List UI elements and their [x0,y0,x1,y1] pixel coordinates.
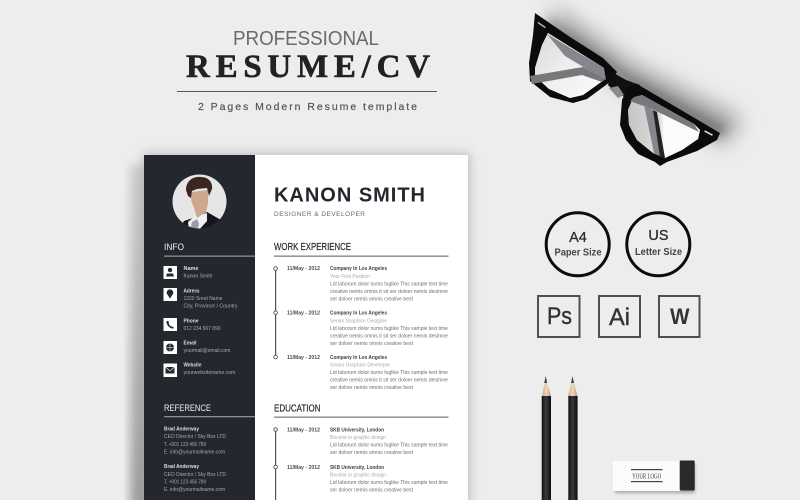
education 1: Boceior in graphic design [330,435,386,441]
software icon: word [659,296,700,337]
job 3: Senior Graphice Developer [330,362,390,368]
reference 2: T. +001 123 456 789 [164,480,206,486]
info item: name: Kanon Smith [184,274,213,280]
education section [274,402,448,500]
info item: address: City, Province / Country [184,304,238,310]
name heading: KANON SMITH [274,184,425,206]
role subtitle: DESIGNER & DEVELOPER [274,211,365,218]
info item: email [164,340,231,354]
eraser [613,460,695,493]
job 1: Company In Los Angeles [330,266,387,272]
profile photo [172,174,226,228]
info item: phone: Phone [184,319,198,325]
job 1: creative nemis omnis it sit ser doloer nemis desimne [330,289,448,295]
job 3: Lid laborum dolor nums fuglike This sample text time [330,370,448,376]
badge: us letter size [627,213,690,276]
job 3: creative nemis omnis it sit ser doloer nemis desimne [330,378,448,384]
job 2: ser doloer nemis omnis creative best [330,341,414,347]
info item: address: 1220 Sreet Name [184,296,223,302]
info item: name: Name [184,266,198,272]
education 2: SKB University, London [330,465,384,471]
title: professional: PROFESSIONAL [233,28,379,50]
job 3: Company In Los Angeles [330,355,387,361]
info heading: INFO [164,242,184,253]
eraser logo text: YOUR LOGO [632,472,662,480]
reference heading: REFERENCE [164,403,211,414]
education 1: Lid laborum dolor nums fuglike This sample text time [330,442,448,448]
education 1: ser doloer nemis omnis creative best [330,450,414,456]
job 3 [274,355,448,391]
info item: address: Adress [184,288,200,294]
job 2: 11/May - 2012 [287,310,320,316]
subtitle: 2 Pages Modern Resume template [198,101,417,113]
resume sheet [130,153,470,500]
left lens temple arms [530,34,606,84]
job 3: ser doloer nemis omnis creative best [330,385,414,391]
reference 1: CEO Director / Sky Box LTD [164,434,226,440]
education 1 [274,428,448,456]
software icon: photoshop: Ps [547,303,572,330]
glasses [529,4,742,166]
education 1: 11/May - 2012 [287,428,320,434]
education 2: Boceior in graphic design [330,472,386,478]
info item: email: Email [184,340,197,346]
sidebar panel [144,155,255,500]
badge: a4 paper size: A4 [569,230,587,246]
reference 1: E. info@yourmailname.com [164,450,226,456]
job 3: 11/May - 2012 [287,355,320,361]
pencil 1 [542,376,551,500]
reference 1: Brad Anderway [164,427,199,433]
work experience section [274,241,448,391]
title block [177,28,437,113]
bridge [608,72,640,98]
left lens frame [529,13,617,103]
reference 1: T. +001 123 456 789 [164,442,206,448]
badge: us letter size: Letter Size [635,246,682,258]
info item: name [164,266,213,280]
info item: phone: 012 234 567 890 [184,326,221,332]
software icon: photoshop [538,296,580,337]
job 1: Your First Position [330,274,370,280]
badge: us letter size: US [648,228,669,244]
education 2: 11/May - 2012 [287,465,320,471]
info item: website: Website [184,363,202,369]
job 2 [274,310,448,347]
job 2: Lid laborum dolor nums fuglike This sample text time [330,326,448,332]
work experience heading: WORK EXPERIENCE [274,241,351,253]
job 2: Senior Graphice Designre [330,318,387,324]
education 2 [274,465,448,494]
job 1: ser doloer nemis omnis creative best [330,296,414,302]
badge: a4 paper size: Paper Size [554,246,602,258]
info item: phone [164,318,221,332]
info item: website [164,363,236,377]
pencil 2 [568,376,578,500]
education 2: Lid laborum dolor nums fuglike This sample text time [330,480,448,486]
education heading: EDUCATION [274,402,320,414]
job 1: Lid laborum dolor nums fuglike This sample text time [330,282,448,288]
education 2: ser doloer nemis omnis creative best [330,488,414,494]
job 2: creative nemis omnis it sit ser doloer nemis desimne [330,334,448,340]
job 1: 11/May - 2012 [287,266,320,272]
right lens frame [620,84,720,166]
software icon: word: W [670,304,690,329]
info item: email: yourmail@email.com [184,348,231,354]
title: resume / cv: RESUME/CV [186,49,430,85]
reference 2: E. info@yourmailname.com [164,487,226,493]
software icon: illustrator: Ai [609,304,630,331]
reference 2 [164,464,226,493]
job 2: Company In Los Angeles [330,310,387,316]
info item: website: yourwebsitename.com [184,370,236,376]
reference 2: CEO Director / Sky Box LTD [164,472,226,478]
badge: a4 paper size [546,213,609,276]
reference 2: Brad Anderway [164,464,199,470]
job 1 [274,266,448,302]
info item: address [164,288,238,310]
education 1: SKB University, London [330,428,384,434]
software icon: illustrator [599,296,640,337]
reference 1 [164,427,226,456]
